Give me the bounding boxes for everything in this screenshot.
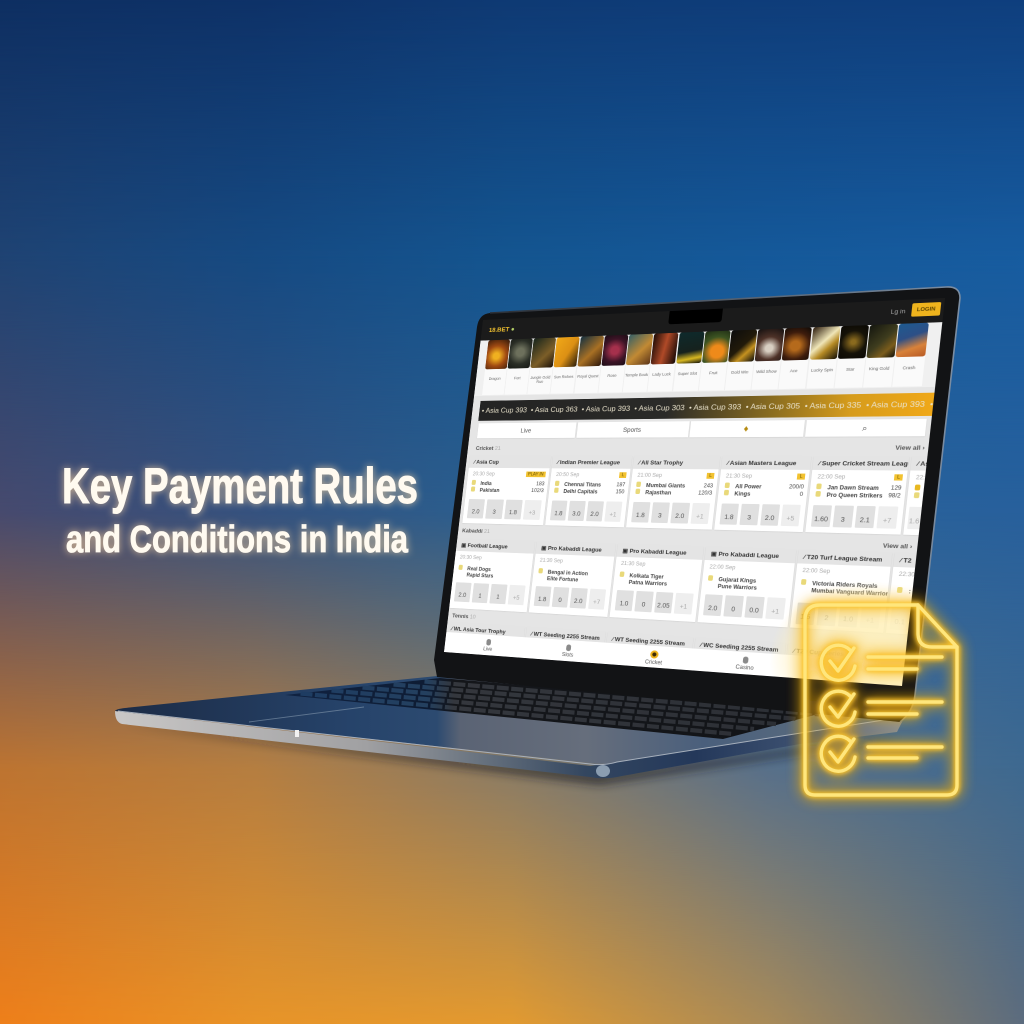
- match cards: row 2: :: [908, 588, 911, 595]
- match cards: row 2: Real Dogs: [467, 566, 491, 572]
- laptop base: [115, 676, 905, 778]
- match cards: row 2: Mumbai Vanguard Warriors: [811, 587, 892, 597]
- match cards: row 1: Mumbai Giants: [646, 482, 686, 489]
- nav items: Casino: [735, 663, 754, 671]
- match cards: row 1: +3: [528, 509, 536, 516]
- match cards: row 2: ⁄ T20 Turf League Stream: [804, 553, 883, 563]
- laptop shadow: [122, 724, 900, 784]
- match cards: row 2: Kolkata Tiger: [629, 572, 664, 580]
- match cards: row 1: 3: [658, 512, 662, 519]
- match cards: row 1: 98/2: [888, 492, 901, 499]
- match cards: row 2: 1: [496, 593, 500, 600]
- thumbnail row: [482, 322, 929, 395]
- match cards: row 3: ⁄ WT Seeding 2255 Stream: [531, 630, 600, 641]
- bottom navigation: [444, 632, 905, 686]
- match cards: row 2: 0: [731, 605, 735, 613]
- thumbnail row: Gold Win: [731, 370, 749, 375]
- match cards: row 2: Rapid Stars: [466, 572, 494, 579]
- thumbnail row: Crash: [902, 365, 916, 370]
- top deck: [115, 676, 900, 764]
- match cards: row 2: Elite Fortune: [547, 575, 578, 583]
- thumbnail row: Rose: [607, 373, 617, 378]
- match cards: row 2: +7: [593, 598, 601, 605]
- match cards: row 1: 102/3: [531, 487, 544, 493]
- match cards: row 1: 3.0: [572, 510, 581, 517]
- deck edge highlight: [118, 711, 890, 765]
- lid rim: [490, 287, 960, 722]
- match cards: row 2: [449, 542, 915, 628]
- match cards: row 2: 20:30 Sep: [460, 554, 482, 561]
- match cards: row 2: ⁄ T2: [900, 556, 912, 564]
- match cards: row 1: 243: [703, 482, 713, 489]
- match cards: row 2: 2.0: [574, 597, 583, 605]
- match cards: row 2: +5: [513, 594, 520, 601]
- match cards: row 2: ▣ Pro Kabaddi League: [711, 550, 779, 559]
- match cards: row 2: 22:00 Sep: [709, 563, 736, 571]
- match cards: row 1: 20:50 Sep: [556, 471, 580, 478]
- thumbnail row: Fruit: [709, 371, 718, 375]
- filter tabs: Live: [520, 427, 532, 434]
- thumbnail row: Royal Quest: [577, 374, 599, 379]
- thumbnail row: Lady Luck: [652, 372, 671, 377]
- thumbnail row: Super Slot: [678, 371, 697, 376]
- logo: 18.BET ●: [488, 326, 515, 334]
- section link: row 1: View all ›: [895, 444, 925, 451]
- notch: [668, 309, 723, 324]
- nav items: [483, 639, 754, 671]
- match cards: row 1: 2.0: [590, 510, 599, 517]
- thumbnail row: Wild Show: [756, 369, 777, 374]
- match cards: row 2: 1.5: [800, 613, 811, 621]
- login button: LOGIN: [917, 306, 936, 313]
- match cards: row 1: Jan Dawn Stream: [827, 484, 879, 491]
- match cards: row 3: ⁄ WT Seeding 2255 Stream: [612, 636, 685, 647]
- match cards: row 2: ▣ Pro Kabaddi League: [622, 547, 687, 556]
- match cards: row 3: ⁄ T20 Cup Series: [793, 647, 844, 658]
- match cards: row 1: +1: [609, 511, 617, 518]
- match cards: row 2: +1: [679, 603, 688, 610]
- match cards: row 1: L: [799, 474, 803, 479]
- login button: [911, 302, 941, 317]
- match cards: row 2: 1.8: [538, 595, 547, 603]
- nav items: Live: [483, 646, 493, 652]
- front edge: [115, 711, 905, 778]
- match cards: row 2: 0.0: [749, 606, 759, 614]
- match cards: row 1: L: [621, 473, 624, 478]
- thumbnail row: Temple Book: [625, 372, 648, 377]
- match cards: row 1: 21:00 Sep: [637, 472, 662, 478]
- match cards: row 3: [450, 625, 844, 658]
- match cards: row 2: 0.1: [894, 618, 905, 626]
- laptop lid bezel: [434, 287, 960, 722]
- outer glow: [805, 605, 957, 795]
- match cards: row 1: 3: [747, 514, 751, 521]
- match cards: row 1: ⁄ Indian Premier League: [557, 459, 620, 466]
- login text: Lg in: [890, 307, 906, 315]
- match cards: row 1: 2.0: [471, 508, 480, 515]
- match cards: row 1: L: [709, 473, 712, 478]
- match cards: row 1: PLAY IN: [528, 472, 544, 477]
- section label: row 2: Kabaddi 21: [462, 527, 490, 534]
- match cards: row 1: 1.8: [636, 511, 645, 519]
- top bar: [481, 298, 945, 341]
- match cards: row 1: ⁄ All Star Trophy: [639, 459, 683, 466]
- match cards: row 2: 0: [641, 601, 646, 608]
- thumbnail row: Sun Riches: [554, 374, 574, 379]
- thumbnail row: Lucky Spin: [811, 367, 833, 373]
- filter tabs: Sports: [623, 426, 641, 433]
- thumbnail row: Ace: [790, 368, 798, 373]
- thumbnail row: Fort: [514, 376, 521, 380]
- thumbnail row: Dragon: [489, 376, 501, 381]
- laptop screen: [444, 298, 945, 686]
- match cards: row 2: +1: [771, 607, 780, 615]
- match cards: row 1: 2.0: [764, 514, 775, 522]
- match cards: row 1: 0: [799, 491, 803, 497]
- match cards: row 2: 21:30 Sep: [621, 560, 646, 567]
- match cards: row 2: 2.05: [657, 601, 670, 609]
- match cards: row 1: India: [480, 480, 492, 486]
- match cards: row 1: ⁄ Asia Cup: [474, 459, 499, 465]
- section link: row 2: View all ›: [883, 542, 913, 550]
- title line 2: and Conditions in India: [66, 519, 409, 561]
- match cards: row 1: Chennai Titans: [564, 481, 601, 488]
- match cards: row 2: 1: [478, 592, 482, 599]
- match cards: row 1: 20:30 Sep: [473, 471, 495, 477]
- keyboard: [285, 678, 830, 739]
- trackpad outline: [249, 707, 364, 722]
- match cards: row 1: +1: [696, 513, 704, 520]
- filter tabs: ♦: [743, 424, 749, 434]
- match cards: row 1: Kings: [734, 490, 751, 497]
- match cards: row 2: +1: [865, 616, 874, 624]
- match cards: row 1: 1.8: [509, 509, 517, 516]
- match cards: row 1: 129: [891, 484, 902, 491]
- match cards: row 2: 0: [558, 596, 562, 603]
- match cards: row 1: +7: [882, 516, 892, 524]
- match cards: row 2: 1.0: [619, 599, 629, 607]
- match cards: row 1: All Power: [735, 483, 762, 490]
- match cards: row 2: ▣ Football League: [461, 542, 508, 550]
- match cards: row 2: 22:30: [898, 571, 915, 578]
- match cards: row 1: 1.8: [724, 513, 734, 521]
- match cards: row 2: Pune Warriors: [717, 583, 757, 591]
- nav items: Slots: [562, 651, 574, 658]
- match cards: row 3: ⁄ WC Seeding 2255 Stream: [700, 641, 779, 653]
- nav items: Cricket: [645, 658, 662, 666]
- front notch highlight: [295, 730, 299, 737]
- ticker bar: [478, 393, 935, 421]
- section label: row 1: Cricket 21: [475, 445, 501, 451]
- inner glow: [805, 605, 957, 795]
- match cards: row 2: Bengal in Action: [547, 569, 588, 577]
- match cards: row 1: Pakistan: [479, 487, 500, 493]
- match cards: row 2: ▣ Pro Kabaddi League: [541, 544, 602, 553]
- match cards: row 2: 21:30 Sep: [540, 557, 563, 564]
- corner highlight: [596, 765, 610, 777]
- match cards: row 2: Patna Warriors: [628, 579, 667, 587]
- section label: row 3: Tennis 10: [452, 612, 476, 620]
- thumbnail row: King Gold: [869, 366, 890, 371]
- match cards: row 2: Gujarat Kings: [718, 576, 757, 584]
- filter tabs: [477, 419, 927, 439]
- match cards: row 1: 1.8: [554, 510, 563, 517]
- match cards: row 1: 200/0: [789, 483, 804, 490]
- match cards: row 1: Pro Queen Strikers: [826, 492, 883, 499]
- match cards: row 1: 3: [840, 516, 845, 523]
- match cards: row 1: 21:30 Sep: [726, 473, 752, 479]
- match cards: row 1: 2.0: [675, 512, 685, 519]
- match cards: row 2: 2: [824, 614, 829, 622]
- thumbnail row: Star: [846, 367, 855, 372]
- match cards: row 2: 2.0: [708, 604, 718, 612]
- icon glow wash on screen: [769, 578, 913, 686]
- match cards: row 2: 22:00 Sep: [802, 567, 830, 575]
- match cards: row 3: ⁄ WL Asia Tour Trophy: [451, 625, 506, 635]
- match cards: row 1: L: [897, 475, 900, 480]
- match cards: row 1: 183: [536, 481, 545, 487]
- match cards: row 1: 3: [492, 508, 496, 515]
- thumbnail row: Jungle Gold Run: [530, 375, 551, 384]
- match cards: row 1: +5: [786, 514, 795, 522]
- match cards: row 2: 1.0: [843, 615, 854, 623]
- match cards: row 1: 1.6: [908, 517, 920, 525]
- icon strokes: [805, 605, 957, 795]
- match cards: row 2: Victoria Riders Royals: [812, 580, 878, 589]
- match cards: row 1: Rajasthan: [645, 489, 672, 496]
- match cards: row 2: 2.0: [458, 591, 467, 598]
- thumbnail strip background: [474, 322, 942, 396]
- match cards: row 1: 22:00 Sep: [817, 473, 846, 480]
- match cards: row 1: ⁄ Asian Masters League: [727, 459, 797, 467]
- match cards: row 1: [462, 459, 927, 536]
- match cards: row 1: 2.1: [859, 516, 870, 524]
- filter tabs: ⌕: [862, 423, 868, 433]
- match cards: row 1: 1.60: [814, 515, 828, 523]
- match cards: row 1: 187: [616, 481, 626, 488]
- match cards: row 1: 120/3: [698, 489, 713, 496]
- match cards: row 1: 150: [615, 488, 625, 495]
- title line 1: Key Payment Rules: [62, 458, 418, 514]
- match cards: row 1: Delhi Capitals: [563, 488, 598, 495]
